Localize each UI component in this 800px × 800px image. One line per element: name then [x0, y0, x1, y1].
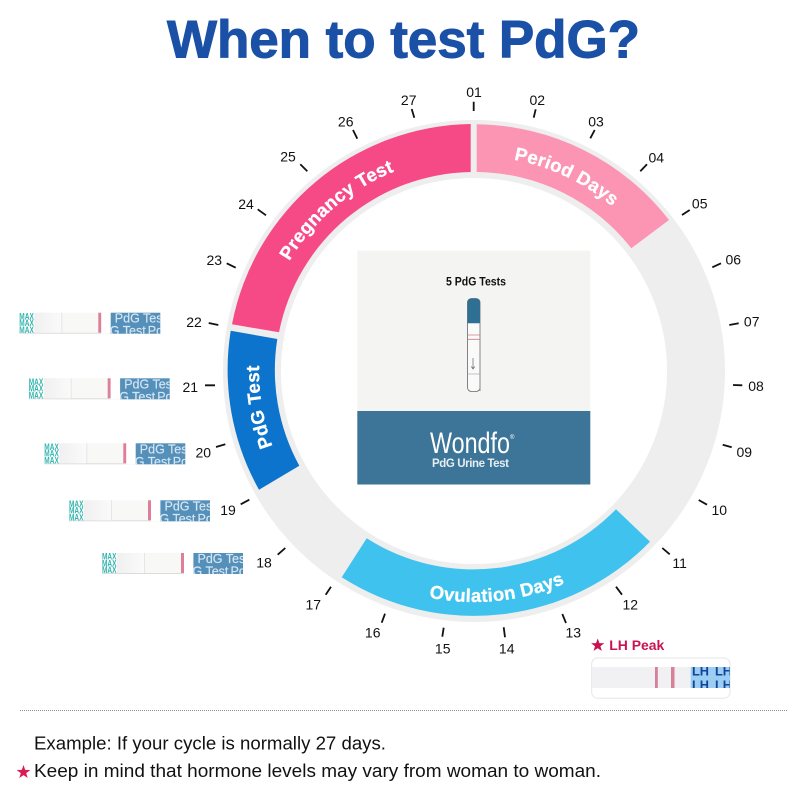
ring track [252, 149, 696, 593]
day ticks and numbers: 08 [748, 378, 764, 394]
day ticks and numbers: 02 [530, 92, 545, 108]
test strip: day 19 [69, 499, 216, 526]
day ticks and numbers: 10 [712, 502, 727, 518]
title: When to test PdG? [167, 10, 640, 69]
LH test strip: LH [715, 678, 732, 692]
day ticks and numbers: 16 [365, 624, 381, 640]
caution line: Keep in mind that hormone levels may vary from woman to woman. [34, 761, 601, 781]
cycle ring [223, 120, 725, 622]
registered mark: ® [510, 434, 515, 441]
segment: pdg test [228, 330, 300, 490]
day ticks and numbers: 23 [207, 252, 222, 268]
brand logo: Wondfo [430, 427, 510, 460]
icon: star [591, 638, 604, 651]
divider [20, 710, 787, 712]
LH peak label [591, 638, 665, 653]
day ticks and numbers: 17 [306, 596, 321, 612]
day ticks and numbers: 18 [256, 555, 272, 571]
LH test strip: LH [692, 664, 709, 678]
day ticks and numbers: 05 [692, 196, 708, 212]
day ticks and numbers: 15 [435, 640, 451, 656]
day ticks and numbers: 24 [238, 196, 254, 212]
segment: ovulation days [342, 509, 650, 616]
package upper panel [357, 251, 590, 412]
day ticks and numbers: 12 [623, 596, 638, 612]
segment: pregnancy test [232, 124, 471, 332]
day ticks and numbers: 11 [672, 555, 687, 571]
day ticks and numbers: 26 [338, 114, 354, 130]
icon: test stick [468, 298, 480, 392]
day ticks and numbers: 14 [499, 640, 515, 656]
LH test strip [592, 658, 732, 698]
segment: pdg test: PdG Test [246, 366, 272, 450]
LH test strip: LH [692, 678, 709, 692]
day ticks and numbers: 03 [588, 114, 604, 130]
day ticks and numbers: 27 [401, 92, 417, 108]
LH peak text: LH Peak [609, 638, 665, 653]
day ticks and numbers: 19 [220, 502, 236, 518]
day ticks and numbers: 13 [566, 625, 581, 641]
day ticks and numbers: 21 [183, 379, 198, 395]
day ticks and numbers: 25 [280, 148, 296, 164]
day ticks and numbers: 04 [649, 149, 664, 165]
segment: period days [476, 124, 669, 248]
test strip: day 20 [44, 442, 192, 469]
package test count: 5 PdG Tests [446, 277, 506, 289]
day ticks and numbers: 01 [466, 84, 482, 100]
segment: ovulation days: Ovulation Days [430, 576, 564, 602]
test strip: day 18 [102, 552, 249, 578]
test strip: day 22 [19, 311, 167, 338]
icon: star bullet [17, 765, 30, 778]
test strip: day 21 [29, 377, 176, 404]
day ticks and numbers: 22 [186, 314, 202, 330]
day ticks and numbers: 09 [737, 444, 752, 460]
segment: period days: Period Days [514, 147, 617, 205]
package lower panel [357, 411, 590, 484]
footnote [17, 734, 601, 781]
day ticks and numbers: 20 [196, 444, 211, 460]
segment: pregnancy test: Pregnancy Test [279, 160, 394, 260]
product package [357, 251, 590, 484]
product name: PdG Urine Test [432, 458, 509, 470]
day ticks and numbers: 07 [744, 314, 760, 330]
day ticks and numbers [183, 84, 764, 656]
day ticks and numbers: 06 [726, 251, 741, 267]
example line: Example: If your cycle is normally 27 days. [34, 734, 386, 754]
LH test strip: LH [715, 664, 732, 678]
